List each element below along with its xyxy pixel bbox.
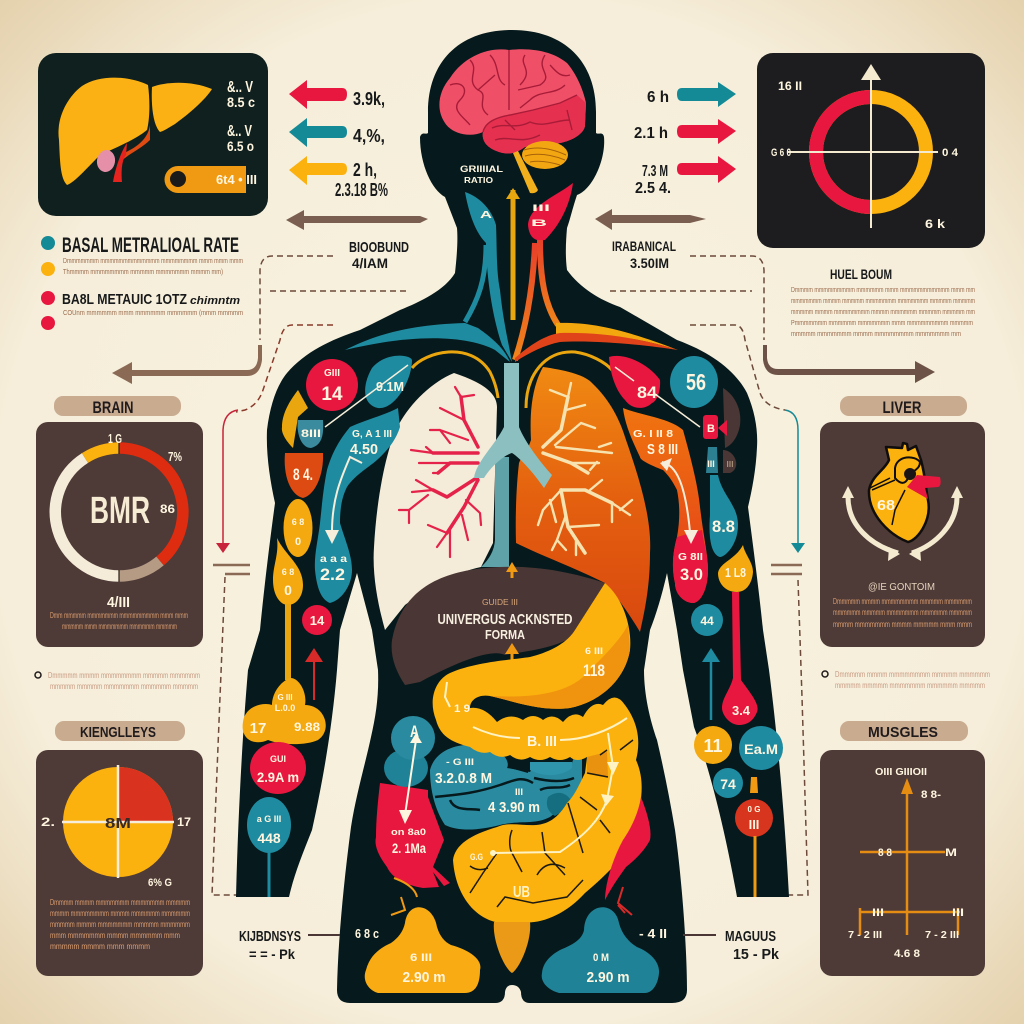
- organ: trachea: [474, 363, 552, 567]
- shoulder teal blob: 9.1M: [376, 379, 404, 394]
- panel: liver heart: @IE GONTOIM: [868, 582, 935, 593]
- organ: liver central: FORMA: [485, 627, 526, 642]
- pie chart: 2.: [41, 815, 55, 829]
- label: kidneys: 6 8 c: [355, 926, 379, 941]
- arrows: top left: 2 h,: [353, 160, 377, 180]
- cross chart: 7 - 2 III: [925, 930, 959, 941]
- shoulder teal oval: [670, 356, 718, 408]
- yellow circle: [694, 726, 732, 764]
- arrows: top left: 2.3.18 B%: [335, 180, 388, 200]
- red up arrow: [305, 648, 323, 700]
- organ: teal lower blob: 2.90 m: [586, 969, 630, 986]
- text: right heading and paragraph: [791, 266, 975, 338]
- liver values: &.. V: [227, 79, 253, 96]
- pie chart: [41, 765, 191, 889]
- arrows: top right: 6 h: [647, 89, 669, 106]
- organ: small squiggle: [391, 878, 417, 915]
- yellow drop: 6 8: [282, 567, 294, 577]
- icon: heart: 68: [877, 497, 895, 514]
- yellow circle: 11: [703, 736, 723, 756]
- red tag: [703, 415, 727, 439]
- cross chart: 8 8-: [921, 789, 941, 801]
- panel: kidneys: mmmmm mmmm mmm mmmm: [50, 942, 150, 951]
- body silhouette: [236, 30, 789, 1003]
- panel: kidneys: mmmmm mmmm mmmmmmm mmmmm mmmmmm: [50, 920, 190, 929]
- yellow drop: 0: [284, 582, 292, 598]
- red orange circle: [735, 799, 773, 897]
- shoulder red circle: GIII: [324, 368, 340, 379]
- organ: liver central: UNIVERGUS ACKNSTED: [438, 611, 573, 628]
- yellow oval: [284, 499, 312, 557]
- label: muscles: - 4 II: [639, 926, 667, 941]
- orange and red arm blob: G. I II 8: [633, 429, 674, 440]
- label: left connector: 4/IAM: [352, 255, 388, 271]
- blue up arrow: [702, 648, 720, 720]
- text: right heading and paragraph: mmmmm mmmmmmm mmmm mmmmmmmm mmmmmmm mm: [791, 331, 961, 338]
- panel: target dial: 6 k: [925, 217, 945, 231]
- organ: stomach and colon: G.G: [470, 852, 483, 862]
- organ: blue intestine: III: [515, 787, 523, 797]
- orange block: 8 4.: [293, 465, 313, 484]
- vessels: neck and collar: [345, 183, 678, 362]
- organ: yellow lower blob: [365, 907, 480, 993]
- panel: target dial: 0 4: [942, 147, 959, 159]
- text: right heading and paragraph: Pmmmmmmm mmmmmm mmmmmmm mmm mmmmmmmmm mmmmm: [791, 320, 973, 327]
- icon: liver: [58, 78, 212, 185]
- panel: target dial: 16 II: [778, 79, 802, 93]
- yellow trefoil: L.0.0: [275, 703, 295, 713]
- organ: blue intestine: [430, 745, 582, 830]
- panel: brain: 1 G: [108, 431, 122, 446]
- yellow oval: 0: [295, 536, 301, 548]
- organ: left kidney group: on 8a0: [391, 827, 426, 837]
- organ: stomach and colon: B. III: [527, 733, 557, 750]
- small tags: [706, 447, 736, 473]
- yellow trefoil: 17: [250, 720, 266, 737]
- organ: brain: [439, 49, 586, 193]
- teal side oval: 8.8: [712, 517, 735, 536]
- arrow: right blue drop: [771, 410, 805, 574]
- liver values: &.. V: [227, 123, 252, 140]
- panel: kidneys: mmmm mmmmmmmm mmmm mmmmmm mmmmmm: [50, 909, 190, 918]
- orange and red arm blob: [623, 408, 708, 603]
- legend: basal metabolic rate: Thmmmm mmmmmmmm mmmmm mmmmmmm mmmm mm): [63, 269, 223, 276]
- label: muscles: 15 - Pk: [733, 946, 780, 963]
- red circle: GUI: [270, 754, 286, 764]
- small teal tag: [298, 420, 323, 448]
- organ: left kidney group: 2. 1Ma: [392, 840, 426, 856]
- cross chart: OIII GIIIOII: [875, 767, 927, 778]
- red orange circle: 0 G: [748, 805, 760, 814]
- cross chart: III: [952, 907, 964, 919]
- legend: basal metabolic rate: Dmmmmmmm mmmmmmmmmmmmm mmmmmmmm mmm mmm mmm: [63, 258, 243, 265]
- yellow drop: [273, 538, 303, 680]
- red circle: [250, 742, 306, 794]
- shoulder red blob: [609, 356, 700, 427]
- arrow: upper right brown: [595, 209, 706, 230]
- panel: brain: 86: [160, 502, 175, 516]
- panel: target dial: [757, 53, 985, 248]
- shoulder red circle: 14: [321, 384, 343, 405]
- organ: right lung: [516, 367, 650, 632]
- left arm organs: [243, 356, 412, 897]
- pie chart: 6% G: [148, 877, 172, 889]
- heading pill: MUSGLES: [868, 724, 938, 741]
- panel: kidneys: [36, 721, 203, 976]
- pie chart: 8M: [105, 815, 131, 832]
- organ: stomach and colon: 1 9: [454, 703, 470, 715]
- arrows: top left: [289, 80, 388, 200]
- label: kidneys: [239, 926, 379, 962]
- panel: brain: 4/III: [107, 594, 130, 611]
- legend: basal metabolic rate: BASAL METRALIOAL RATE: [62, 234, 239, 257]
- yellow side strip: [282, 390, 308, 448]
- legend: basal metabolic rate: BA8L METAUIC 1OTZ: [62, 291, 187, 308]
- cross chart: 8 8: [878, 847, 892, 859]
- arrows: top right: [634, 82, 736, 197]
- panel: brain: Dmm mmmmm mmmmmmm mmmmmmmmm mmm mmm: [50, 611, 188, 620]
- text: right heading and paragraph: Dmmmm mmmmmmmmm mmmmmm mmm mmmmmmmmmmm mmm mm: [791, 287, 975, 294]
- arrows: top right: 2.5 4.: [635, 180, 671, 197]
- orange stem: [750, 777, 758, 793]
- right arm organs: [609, 356, 783, 897]
- yellow trefoil: G III: [277, 693, 293, 702]
- teal upper arm: 4.50: [350, 441, 378, 458]
- red long drop: 3.4: [732, 703, 751, 718]
- pie chart: 17: [177, 815, 191, 829]
- arrows: top right: 2.1 h: [634, 125, 668, 142]
- pill gauge: 6t4 • III: [216, 172, 257, 187]
- red small circle: 14: [310, 613, 325, 628]
- dashed connectors right: [610, 256, 808, 895]
- text: right heading and paragraph: HUEL BOUM: [830, 266, 892, 282]
- label: muscles: [639, 926, 780, 963]
- vessels: yellow arcs over lungs: [412, 352, 612, 408]
- heading pill: KIENGLLEYS: [80, 724, 156, 741]
- note right: [822, 670, 990, 690]
- organ: blue intestine: - G III: [446, 757, 474, 767]
- label: kidneys: KIJBDNSYS: [239, 928, 301, 945]
- label: kidneys: = = - Pk: [249, 946, 295, 962]
- teal small circle: [691, 604, 723, 636]
- teal small: 74: [720, 776, 736, 792]
- panel: liver card: [38, 53, 268, 216]
- dashed connectors left: [212, 256, 408, 895]
- arrow: left red drop: [213, 410, 250, 574]
- label: muscles: MAGUUS: [725, 928, 776, 945]
- panel: kidneys: mmm mmmmmmm mmmm mmmmmm mmm: [50, 931, 180, 940]
- panel: liver heart: [820, 396, 985, 647]
- ring chart: [55, 448, 183, 576]
- panel: kidneys: Dmmmm mmmm mmmmmmm mmmmmmm mmmmm: [50, 898, 190, 907]
- liver values: 6.5 o: [227, 138, 254, 154]
- panel: brain: mmmmm mmm mmmmmmm mmmmmm mmmmm: [62, 622, 177, 631]
- teal oval: a G III: [257, 814, 281, 824]
- liver values: [227, 79, 255, 154]
- arrows: top left: 4,%,: [353, 126, 385, 146]
- organ: liver central: [392, 562, 605, 685]
- red circle: 2.9A m: [257, 769, 299, 785]
- heading pill: LIVER: [882, 398, 922, 417]
- red small circle: [302, 605, 332, 635]
- panel: target dial: G 6 0: [771, 147, 791, 159]
- red tag: B: [707, 423, 715, 435]
- cross chart: 7 - 2 III: [848, 930, 882, 941]
- organ: left kidney group: A: [410, 722, 419, 741]
- heading pill: BRAIN: [92, 398, 134, 417]
- teal oval: 448: [257, 830, 281, 846]
- shoulder teal oval: 56: [686, 369, 706, 395]
- small teal tag: 8III: [301, 428, 321, 440]
- legend: basal metabolic rate: chimntm: [190, 295, 240, 307]
- organ: right red strip: [605, 797, 651, 915]
- cross chart: III: [872, 907, 884, 919]
- yellow drop: 1 L8: [725, 565, 746, 580]
- organ: teal lower blob: [542, 907, 659, 993]
- shoulder teal blob: [325, 356, 412, 427]
- cross chart: 4.6 8: [894, 948, 920, 960]
- panel: brain: BMR: [90, 490, 150, 532]
- small tags: III: [707, 459, 715, 469]
- teal circle: Ea.M: [744, 741, 778, 757]
- cross chart: [848, 767, 964, 960]
- organ: left lung: [374, 373, 497, 630]
- teal upper arm: [315, 408, 400, 603]
- heading pill: [55, 721, 185, 741]
- liver values: 8.5 c: [227, 94, 255, 110]
- organ: brain: RATIO: [464, 176, 493, 185]
- note left: [35, 671, 200, 691]
- note left: Dmmmmm mmmm mmmmmmmm mmmmm mmmmmm: [48, 671, 200, 680]
- organ: stomach and colon: [433, 583, 642, 973]
- teal upper arm: G, A 1 III: [352, 429, 392, 440]
- yellow trefoil: 9.88: [294, 720, 320, 734]
- panel: muscles: [820, 721, 985, 976]
- label: right connector: 3.50IM: [630, 255, 669, 271]
- orange block: [285, 453, 323, 498]
- legend: basal metabolic rate: [41, 234, 243, 330]
- heading pill: [54, 396, 181, 417]
- organ: brain: GRIIIIAL: [460, 164, 504, 174]
- organ: yellow lower blob: 6 III: [410, 952, 432, 964]
- heading pill: [840, 396, 967, 417]
- arrows: top right: 7.3 M: [642, 163, 668, 180]
- teal small circle: 44: [700, 614, 714, 628]
- vessels: neck and collar: III: [532, 203, 550, 213]
- teal upper arm: 2.2: [320, 565, 345, 584]
- pill gauge: [164, 166, 257, 193]
- arrow: middle right long: [763, 345, 935, 383]
- teal upper arm: a a a: [320, 554, 348, 565]
- label: left connector: BIOOBUND: [349, 239, 409, 256]
- teal circle: [739, 726, 783, 770]
- organ: stomach and colon: UB: [513, 884, 530, 901]
- panel: brain: 7%: [168, 449, 182, 464]
- note left: mmmmm mmmmm mmmmmmm mmmmmm mmmmm: [50, 682, 198, 691]
- dark plum shape: [723, 388, 740, 448]
- arrow: middle left long: [112, 345, 262, 384]
- teal side oval: [709, 475, 738, 557]
- label: left connector: [349, 239, 409, 271]
- organ: blue intestine: 3.2.0.8 M: [435, 770, 492, 787]
- yellow trefoil: [243, 678, 326, 744]
- teal oval: [247, 797, 291, 897]
- organ: blue intestine: 4 3.90 m: [488, 799, 540, 816]
- orange and red arm blob: S 8 III: [647, 441, 678, 458]
- yellow drop: [718, 545, 753, 592]
- cross chart: M: [945, 847, 957, 859]
- label: right connector: IRABANICAL: [612, 238, 676, 254]
- cycle arrows: [848, 497, 957, 553]
- shoulder red blob: 84: [637, 383, 658, 402]
- arrows: top left: 3.9k,: [353, 89, 385, 109]
- heading pill: [840, 721, 968, 741]
- stomach shading: [490, 625, 630, 709]
- icon: heart: [869, 443, 941, 542]
- organ: yellow lower blob: 2.90 m: [402, 969, 446, 986]
- panel: liver heart: mmmm mmmmmmm mmmm mmmmm mmm mmm: [833, 620, 972, 629]
- label: right connector: [612, 238, 676, 271]
- small tags: III: [727, 460, 733, 469]
- organ: left kidney group: [375, 716, 450, 888]
- vessels: neck and collar: A: [480, 210, 492, 221]
- organ: teal lower blob: 0 M: [593, 952, 609, 964]
- organ: stomach and colon: 6 III: [585, 646, 603, 656]
- panel: brain: [36, 396, 203, 647]
- shoulder red circle: [306, 359, 358, 411]
- orange and red arm blob: G 8II: [678, 552, 703, 563]
- red orange circle: III: [749, 817, 759, 832]
- arrow: upper left brown: [286, 210, 428, 230]
- legend: basal metabolic rate: COUnm mmmmmm mmm mmmmmm mmmmmm (mmm mmmmm: [63, 310, 243, 317]
- red long drop: [722, 592, 758, 725]
- vessels: neck and collar: B: [531, 218, 548, 228]
- organ: liver central: GUIDE III: [482, 598, 518, 607]
- teal small: [713, 768, 743, 798]
- orange and red arm blob: 3.0: [680, 565, 703, 584]
- organ: stomach and colon: 118: [583, 661, 605, 680]
- yellow oval: 6 8: [292, 517, 304, 527]
